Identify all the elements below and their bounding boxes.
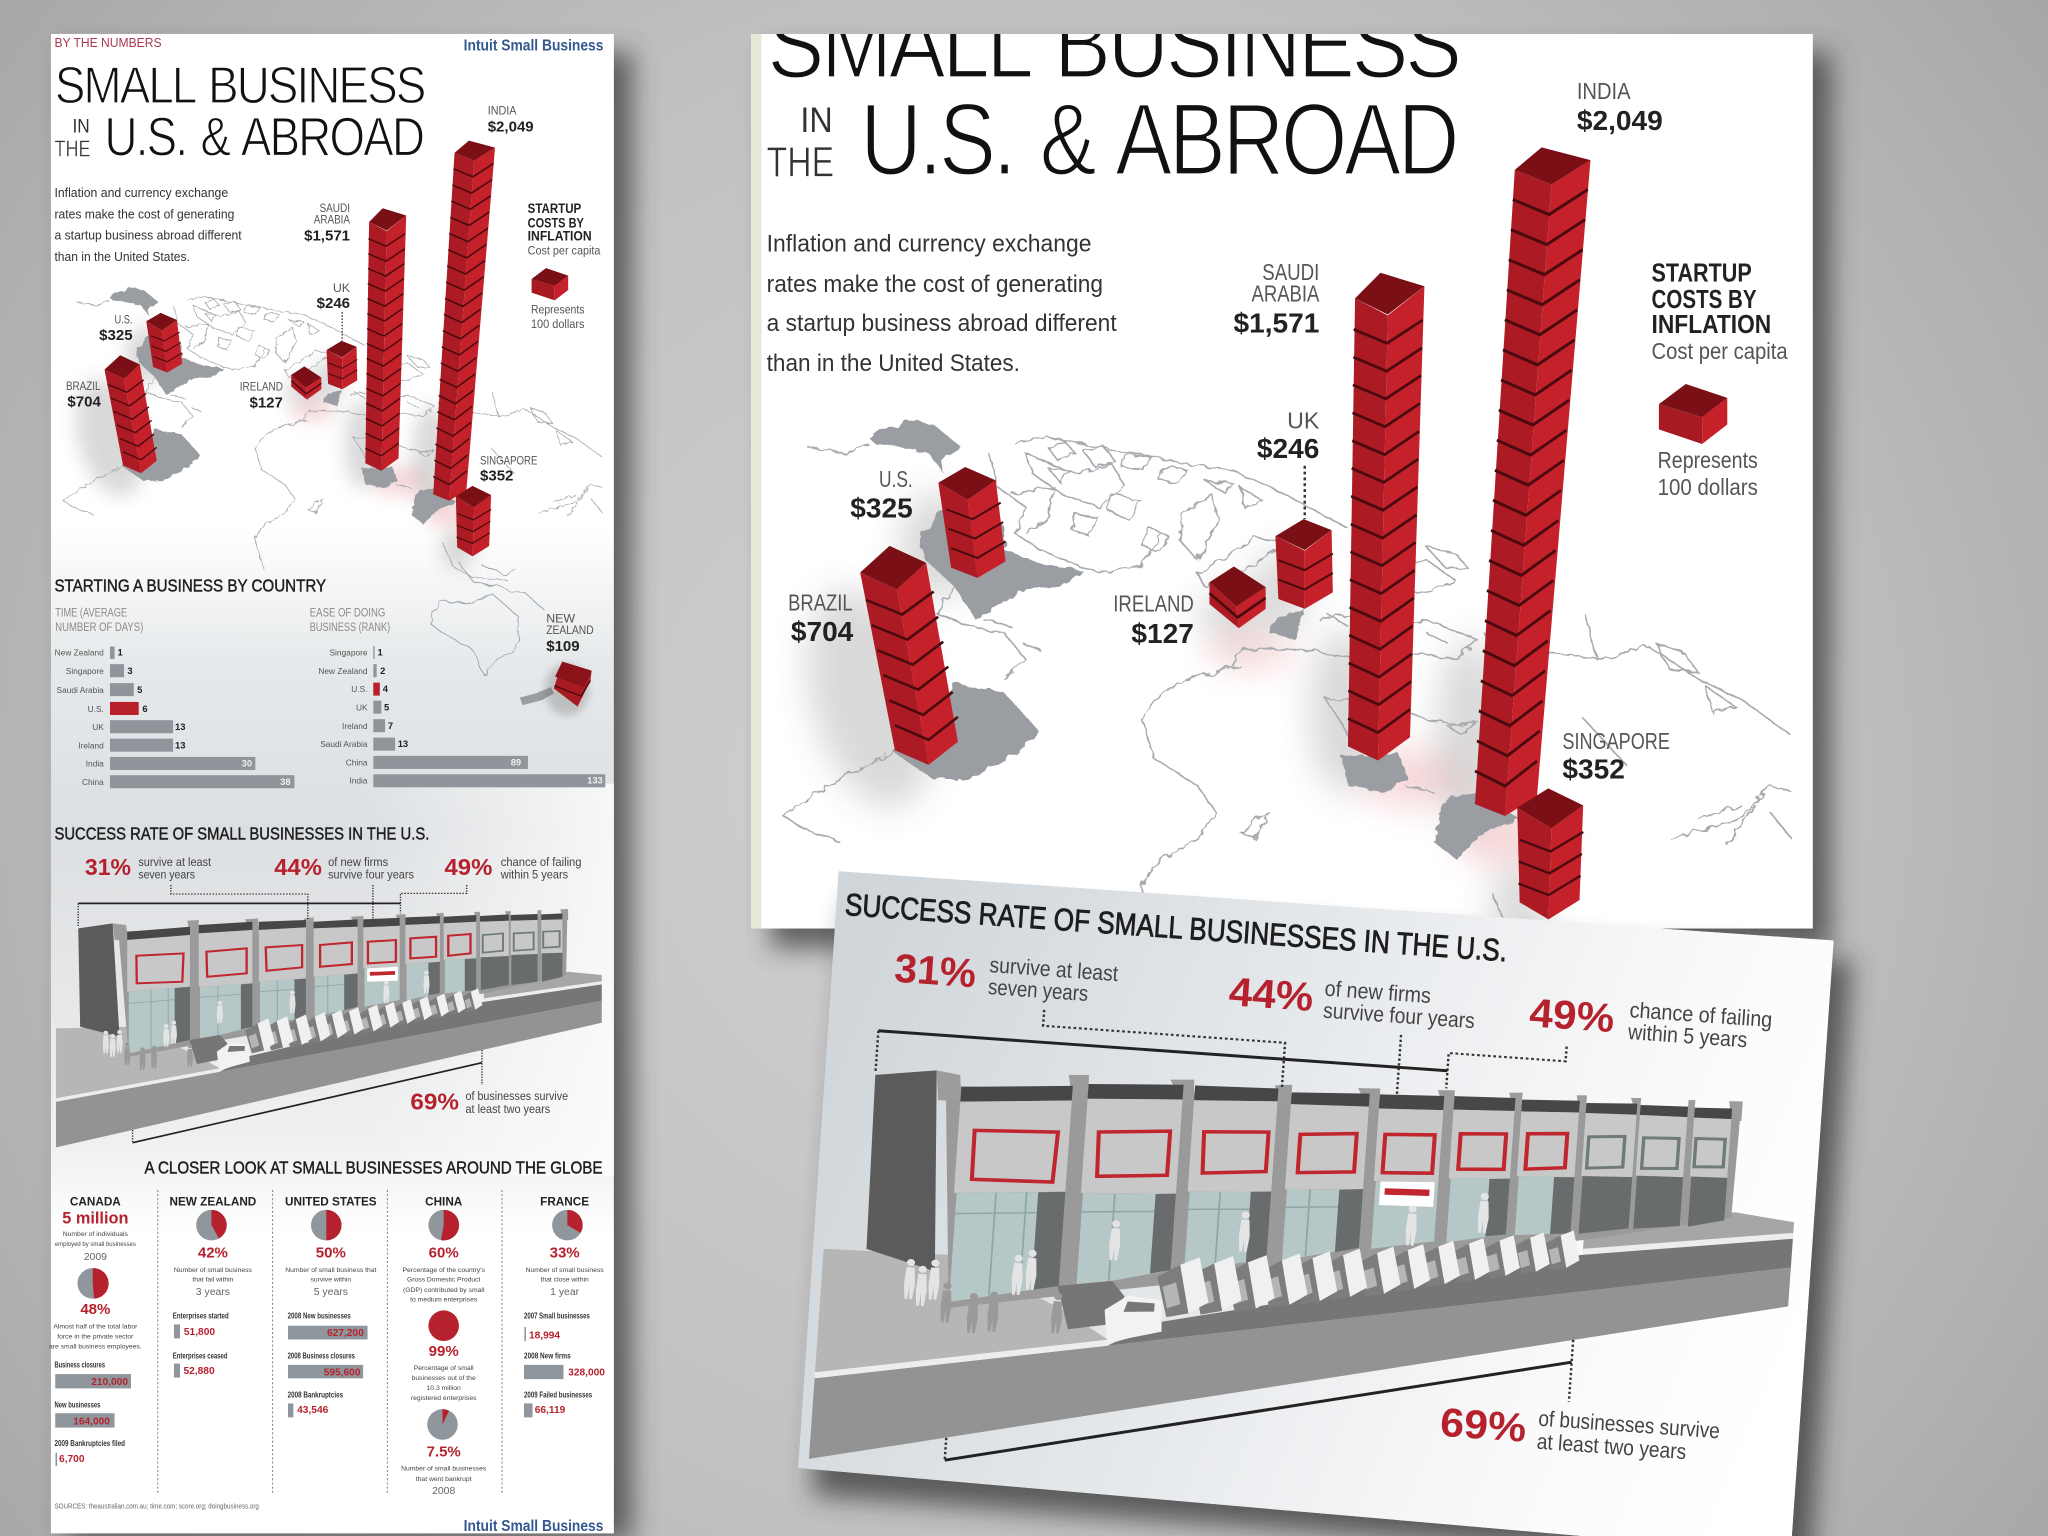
bar chart: time in days: 13 [175, 739, 185, 750]
column: France [524, 1196, 605, 1417]
column: China: Gross Domestic Product [407, 1277, 481, 1284]
tower labels: SAUDI [319, 201, 350, 215]
column: New Zealand: 52,880 [184, 1366, 215, 1377]
column: Canada: Almost half of the total labor [53, 1323, 138, 1330]
heading: starting a business: STARTING A BUSINESS BY COUNTRY [54, 576, 326, 596]
callout: 69 percent [410, 1088, 568, 1116]
title: SMALL BUSINESS [55, 57, 425, 115]
bar chart: ease of doing business [310, 605, 605, 787]
map and cost towers [63, 141, 603, 705]
column: China: Number of small businesses [401, 1466, 487, 1473]
title enlarged [768, 34, 1458, 176]
column: New Zealand: that fail within [192, 1277, 234, 1284]
column: Canada: New businesses [54, 1400, 101, 1409]
bar chart: ease of doing business: Singapore [329, 648, 368, 658]
legend [528, 201, 601, 331]
column: United States: 2008 Business closures [288, 1351, 355, 1360]
bar chart: ease of doing business: BUSINESS (RANK) [310, 620, 390, 634]
title enlarged: U.S. & ABROAD [860, 82, 1456, 197]
tower labels: BRAZIL [66, 379, 101, 393]
tower labels: U.S. [115, 313, 133, 327]
column: Canada: 210,000 [91, 1377, 128, 1388]
intro paragraph [54, 185, 242, 264]
bar chart: time in days: NUMBER OF DAYS) [55, 620, 143, 634]
column: New Zealand [169, 1196, 256, 1378]
shadow: top right panel [771, 52, 1831, 948]
tower labels: INDIA [488, 104, 517, 118]
tower labels: UK [333, 281, 351, 295]
bar chart: ease of doing business: China [346, 757, 368, 767]
bar chart: ease of doing business: 133 [587, 775, 603, 786]
intro paragraph enlarged: Inflation and currency exchange [767, 231, 1092, 258]
tilted content [809, 893, 1794, 1462]
legend: Cost per capita [528, 244, 601, 258]
bar chart: ease of doing business: New Zealand [318, 666, 368, 676]
column: Canada: 2009 [84, 1252, 107, 1263]
callouts enlarged: 49% [1528, 989, 1616, 1041]
column: Canada: Business closures [54, 1361, 105, 1370]
callouts: success rates: chance of failing [501, 855, 582, 869]
enlarged content [766, 34, 1792, 921]
tower labels enlarged: SINGAPORE [1562, 728, 1670, 754]
bar chart: ease of doing business: 7 [388, 720, 393, 731]
column: France: 2009 Failed businesses [524, 1391, 593, 1400]
tower labels enlarged: $325 [850, 493, 913, 523]
shadow: left panel [68, 52, 632, 1536]
column: China: (GDP) contributed by small [403, 1287, 485, 1294]
column: New Zealand: Enterprises ceased [173, 1351, 228, 1360]
bar chart: time in days: TIME (AVERAGE [55, 605, 127, 619]
bar chart: time in days: U.S. [88, 704, 104, 714]
callouts: success rates: 31% [85, 854, 131, 880]
intro paragraph: rates make the cost of generating [54, 207, 234, 222]
bar chart: ease of doing business: 2 [380, 665, 385, 676]
heading enlarged: SUCCESS RATE OF SMALL BUSINESSES IN THE U.S. [844, 887, 1508, 968]
sources: SOURCES: theaustralian.com.au; time.com; score.org; doingbusiness.org [54, 1504, 259, 1511]
tower labels: $704 [67, 393, 101, 410]
callouts: success rates: survive at least [138, 855, 212, 869]
column: France: 2007 Small businesses [524, 1311, 590, 1320]
69 percent callout enlarged [1442, 1408, 1719, 1460]
column dividers [158, 1190, 502, 1493]
bar chart: ease of doing business: India [349, 776, 368, 786]
callouts enlarged: 44% [1227, 968, 1315, 1020]
callouts enlarged: survive at least [989, 952, 1119, 986]
tower labels enlarged: BRAZIL [788, 589, 853, 615]
tower labels: IRELAND [240, 380, 283, 394]
callouts enlarged [895, 954, 1772, 1049]
column: Canada: 6,700 [59, 1454, 85, 1465]
tower labels: $2,049 [488, 118, 534, 135]
bar chart: time in days: 38 [280, 776, 291, 787]
callouts enlarged: within 5 years [1626, 1019, 1748, 1052]
bar chart: time in days: New Zealand [55, 648, 104, 658]
callouts: success rates: 44% [274, 854, 322, 880]
title enlarged: THE [767, 139, 834, 186]
title: IN [72, 116, 90, 137]
callouts enlarged: of new firms [1324, 976, 1432, 1008]
legend enlarged: Represents [1658, 447, 1758, 473]
column: New Zealand: Enterprises started [173, 1311, 229, 1320]
column: United States: 2008 New businesses [288, 1311, 351, 1320]
column: Canada: are small business employees. [49, 1343, 142, 1350]
callouts: success rates: seven years [138, 867, 195, 881]
bar chart: ease of doing business: 13 [398, 738, 408, 749]
bar chart: ease of doing business: 1 [377, 647, 383, 658]
column: United States: 595,600 [324, 1367, 361, 1378]
intro paragraph: Inflation and currency exchange [54, 185, 228, 200]
tower labels: $352 [480, 468, 513, 485]
tower labels: $109 [546, 638, 580, 655]
column: France: 2008 New firms [524, 1351, 571, 1360]
brand logo bottom: Intuit Small Business [464, 1518, 604, 1535]
column: China: registered enterprises [411, 1395, 477, 1402]
column: China: Percentage of the country's [403, 1267, 485, 1274]
legend enlarged: COSTS BY [1652, 286, 1757, 314]
column: Canada: force in the private sector [57, 1333, 134, 1340]
new zealand cube [545, 662, 592, 716]
tower labels: NEW [546, 611, 575, 625]
bar chart: ease of doing business: Saudi Arabia [320, 739, 368, 749]
column: United States: 50% [316, 1244, 346, 1261]
column: China: CHINA [425, 1196, 463, 1209]
tower labels: $127 [249, 395, 283, 412]
callout: 69 percent: at least two years [466, 1102, 550, 1116]
title: THE [54, 135, 91, 161]
bar chart: time in days: 30 [242, 758, 252, 769]
bar chart: ease of doing business: 5 [384, 702, 389, 713]
bar chart: time in days: India [86, 759, 104, 769]
column: China: 2008 [432, 1486, 455, 1497]
tower labels enlarged: $246 [1257, 433, 1319, 464]
title enlarged: IN [800, 101, 833, 140]
legend enlarged [1652, 260, 1788, 500]
callouts enlarged: chance of failing [1629, 997, 1773, 1032]
69 percent callout enlarged: 69% [1439, 1399, 1528, 1451]
bar chart: time in days: China [82, 777, 104, 787]
column: France: 328,000 [568, 1367, 605, 1378]
tower labels: SINGAPORE [480, 454, 537, 468]
column: Canada: 2009 Bankruptcies filed [54, 1439, 125, 1448]
tower labels enlarged: U.S. [879, 466, 913, 492]
bar chart: ease of doing business: EASE OF DOING [310, 605, 385, 619]
column: France: 1 year [550, 1287, 580, 1298]
title: U.S. & ABROAD [104, 105, 423, 167]
legend: 100 dollars [531, 317, 584, 331]
bar chart: ease of doing business: UK [356, 703, 368, 713]
callouts: success rates: within 5 years [500, 867, 568, 881]
tower labels enlarged: ARABIA [1251, 280, 1320, 306]
intro paragraph enlarged [767, 231, 1117, 377]
column: United States: Number of small business that [285, 1267, 377, 1274]
column: China: Percentage of small [414, 1365, 474, 1372]
tower labels enlarged: INDIA [1577, 78, 1631, 104]
column: United States: UNITED STATES [285, 1196, 377, 1209]
legend enlarged: 100 dollars [1658, 474, 1758, 500]
column: China: 7.5% [427, 1444, 461, 1461]
column: Canada: 5 million [62, 1209, 128, 1227]
bar chart: ease of doing business: 4 [383, 683, 389, 694]
column: United States: 5 years [314, 1287, 348, 1298]
legend enlarged: STARTUP [1652, 260, 1752, 287]
callouts: success rates: of new firms [328, 855, 388, 869]
intro paragraph enlarged: a startup business abroad different [767, 310, 1117, 337]
column: China: that went bankrupt [416, 1476, 472, 1483]
bar chart: time in days: Singapore [66, 666, 104, 676]
tower labels enlarged: $704 [791, 616, 854, 647]
tower labels [66, 104, 594, 655]
column: China [401, 1196, 487, 1497]
column: United States: 2008 Bankruptcies [288, 1391, 344, 1400]
column: France: Number of small business [526, 1267, 604, 1274]
tower labels enlarged: SAUDI [1262, 259, 1319, 285]
storefront enlarged [809, 1010, 1794, 1462]
column: China: 60% [429, 1244, 459, 1261]
tower labels: ARABIA [314, 213, 351, 227]
column: France: that close within [541, 1277, 589, 1284]
column: Canada: Number of individuals [63, 1231, 129, 1238]
tower labels enlarged: $2,049 [1577, 105, 1663, 136]
bar chart: time in days: Ireland [78, 740, 104, 750]
brand logo top: Intuit Small Business [464, 37, 604, 54]
bar chart: ease of doing business: U.S. [351, 684, 368, 694]
tower labels: $325 [99, 327, 133, 344]
intro paragraph enlarged: than in the United States. [767, 350, 1020, 377]
column: Canada: 164,000 [73, 1416, 110, 1427]
callouts: success rates [85, 854, 582, 881]
intro paragraph: a startup business abroad different [54, 228, 242, 243]
bar chart: ease of doing business: 89 [511, 756, 521, 767]
callouts: success rates: survive four years [328, 867, 414, 881]
bar chart: time in days: Saudi Arabia [57, 685, 104, 695]
column: New Zealand: Number of small business [174, 1267, 253, 1274]
column: New Zealand: 3 years [196, 1287, 230, 1298]
column: China: businesses out of the [412, 1375, 476, 1382]
tower labels enlarged: $127 [1131, 618, 1194, 649]
bar chart: ease of doing business: Ireland [342, 721, 368, 731]
tower labels enlarged: $1,571 [1234, 307, 1319, 338]
heading: closer look: A CLOSER LOOK AT SMALL BUSINESSES AROUND THE GLOBE [144, 1157, 603, 1177]
column: New Zealand: 51,800 [184, 1327, 215, 1338]
column: New Zealand: NEW ZEALAND [169, 1196, 256, 1209]
kicker: BY THE NUMBERS [54, 35, 162, 50]
callouts enlarged: seven years [987, 974, 1089, 1006]
callouts enlarged: survive four years [1322, 998, 1476, 1033]
column: France: 33% [550, 1244, 580, 1261]
column: China: 99% [429, 1343, 459, 1360]
bar chart: time in days: 5 [137, 684, 142, 695]
heading: success rate: SUCCESS RATE OF SMALL BUSINESSES IN THE U.S. [54, 823, 429, 843]
tower labels enlarged [788, 78, 1670, 785]
panel: tilted success rate detail [798, 871, 1834, 1536]
bar chart: time in days: 13 [175, 721, 185, 732]
column: Canada: CANADA [70, 1196, 121, 1209]
column: Canada: 48% [80, 1301, 110, 1318]
column: New Zealand: 42% [198, 1244, 228, 1261]
title [54, 57, 425, 167]
legend enlarged: INFLATION [1652, 311, 1771, 339]
column: France: 66,119 [535, 1405, 566, 1416]
shadow: tilted panel [812, 901, 1852, 1536]
tower labels enlarged: $352 [1562, 754, 1625, 785]
bar chart: time in days: 1 [118, 647, 123, 658]
tower labels enlarged: UK [1287, 408, 1320, 434]
callouts: success rates: 49% [444, 854, 492, 880]
column: China: 10.3 million [427, 1385, 461, 1392]
legend: Represents [531, 302, 584, 316]
column: France: 18,994 [529, 1330, 560, 1341]
tower labels: ZEALAND [546, 623, 594, 637]
intro paragraph enlarged: rates make the cost of generating [767, 271, 1103, 298]
column: Canada [49, 1196, 142, 1466]
column: Canada: employed by small businesses [55, 1241, 136, 1248]
legend: INFLATION [528, 229, 592, 244]
panel: enlarged map detail [751, 34, 1813, 929]
69 percent callout enlarged: at least two years [1536, 1429, 1687, 1464]
legend: COSTS BY [528, 215, 584, 230]
column: United States: 43,546 [297, 1405, 329, 1416]
bar chart: time in days: UK [92, 722, 104, 732]
bar chart: time in days: 3 [127, 665, 133, 676]
callouts enlarged: 31% [893, 945, 978, 996]
69 percent callout enlarged: of businesses survive [1538, 1406, 1721, 1443]
map and towers enlarged [782, 147, 1792, 921]
callout: 69 percent: 69% [410, 1088, 459, 1114]
column: France: FRANCE [540, 1196, 589, 1209]
panel: full infographic page [49, 34, 614, 1535]
bar chart: time in days [55, 605, 294, 788]
legend enlarged: Cost per capita [1652, 338, 1788, 364]
callout: 69 percent: of businesses survive [466, 1089, 568, 1103]
column: United States [285, 1196, 377, 1417]
legend: STARTUP [528, 201, 581, 216]
tower labels: $246 [317, 295, 350, 312]
intro paragraph: than in the United States. [54, 249, 190, 264]
bar chart: time in days: 6 [142, 703, 148, 714]
column: China: to medium enterprises [410, 1297, 478, 1304]
column: United States: survive within [310, 1277, 351, 1284]
tower labels: $1,571 [304, 227, 350, 244]
tower labels enlarged: IRELAND [1113, 590, 1194, 616]
illustration: storefront row [56, 885, 602, 1147]
column: United States: 627,200 [327, 1328, 364, 1339]
